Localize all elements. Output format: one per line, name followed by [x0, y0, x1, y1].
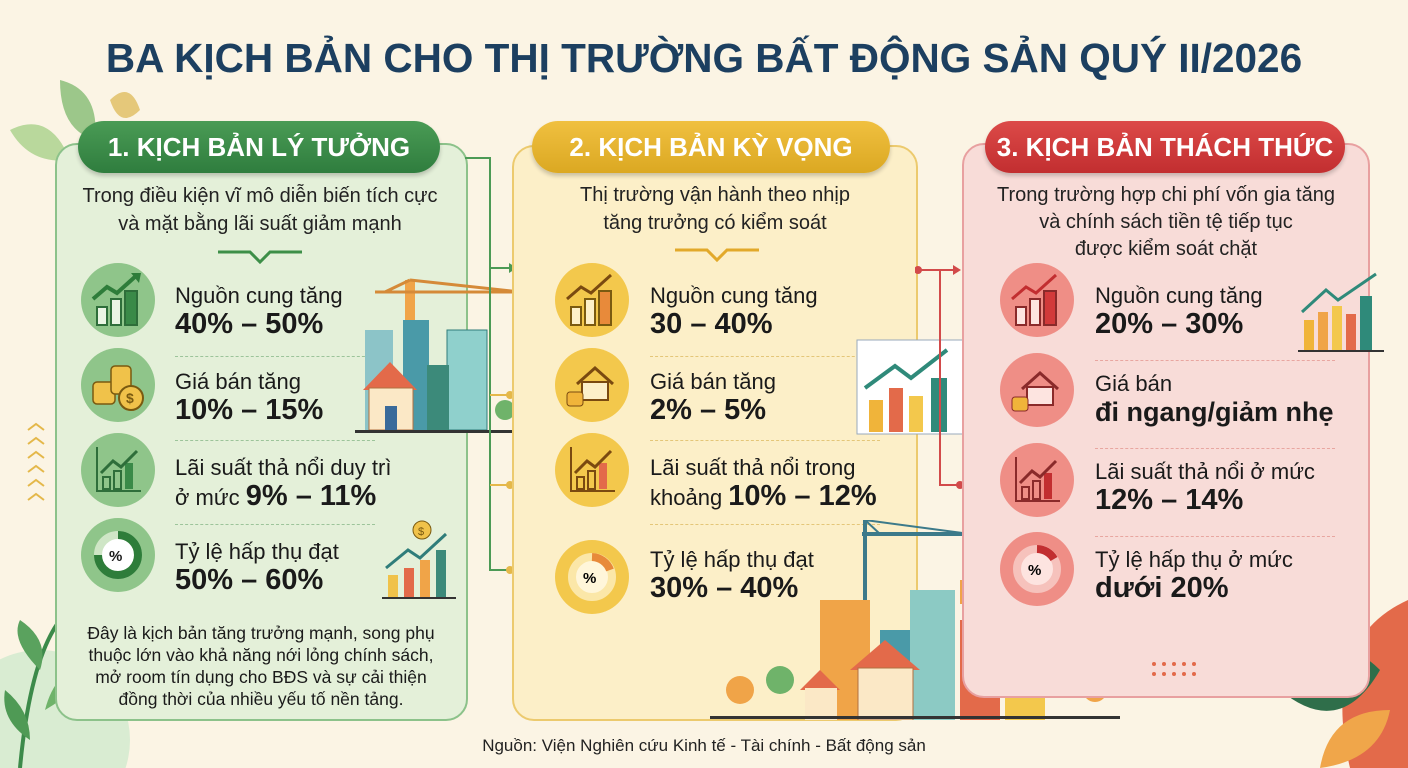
rows: scenario 1: Lãi suất thả nổi duy trì [175, 455, 391, 480]
rows: scenario 1: Giá bán tăng [175, 369, 301, 394]
header: scenario 1 [78, 121, 440, 173]
subtitle: scenario 1: và mặt bằng lãi suất giảm mạnh [118, 213, 402, 235]
panel: scenario 3 [962, 143, 1370, 698]
decorative leaves bottom-right [1290, 600, 1408, 768]
title: BA KỊCH BẢN CHO THỊ TRƯỜNG BẤT ĐỘNG SẢN QUÝ II/2026 [106, 35, 1302, 81]
illustration: chart between 2 and 3 [856, 340, 962, 434]
subtitle: scenario 1 [82, 184, 438, 235]
subtitle: scenario 2: tăng trưởng có kiểm soát [603, 212, 827, 234]
decorative leaves bottom-left [0, 620, 130, 768]
rows: scenario 2: Tỷ lệ hấp thụ đạt [650, 547, 814, 572]
panel: scenario 2 [512, 145, 918, 721]
subtitle: scenario 3: và chính sách tiền tệ tiếp tục [1039, 211, 1293, 233]
rows: scenario 3: 12% – 14% [1095, 484, 1243, 516]
rows: scenario 3: 20% – 30% [1095, 308, 1243, 340]
icon: supply chart [1000, 263, 1074, 337]
rows: scenario 1: 40% – 50% [175, 308, 323, 340]
rows: scenario 1: Tỷ lệ hấp thụ đạt [175, 539, 339, 564]
icon: house and coins [1000, 353, 1074, 427]
icon: absorption donut: % [109, 548, 122, 565]
header: scenario 3: 3. KỊCH BẢN THÁCH THỨC [997, 132, 1333, 162]
rows: scenario 1: 10% – 15% [175, 394, 323, 426]
rows: scenario 2: 30 – 40% [650, 308, 773, 340]
illustration: city bottom center [710, 520, 1120, 720]
icon: coins [81, 348, 155, 422]
rows: scenario 1: 50% – 60% [175, 564, 323, 596]
decorative dots [1152, 662, 1196, 676]
icon: chart panel 3 [1298, 272, 1384, 352]
header: scenario 3 [985, 121, 1345, 173]
icon: interest chart [81, 433, 155, 507]
icon: absorption donut [1000, 532, 1074, 606]
footer note: scenario 1 [87, 623, 435, 709]
rows: scenario 2: 30% – 40% [650, 572, 798, 604]
header: scenario 2: 2. KỊCH BẢN KỲ VỌNG [569, 132, 853, 162]
decorative leaves top-left [10, 80, 140, 160]
rows: scenario 3: Giá bán [1095, 371, 1172, 396]
icon: supply chart [555, 263, 629, 337]
icon: interest chart [1000, 443, 1074, 517]
subtitle: scenario 3: được kiểm soát chặt [1075, 238, 1257, 260]
footer note: scenario 1: Đây là kịch bản tăng trưởng mạnh, song phụ [87, 623, 435, 643]
rows: scenario 2: Lãi suất thả nổi trong [650, 455, 855, 480]
icon: coins: $ [126, 390, 134, 406]
subtitle: scenario 2: Thị trường vận hành theo nhịp [580, 184, 850, 206]
rows: scenario 2: Giá bán tăng [650, 369, 776, 394]
rows: scenario 2: Nguồn cung tăng [650, 283, 818, 308]
subtitle: scenario 1: Trong điều kiện vĩ mô diễn biến tích cực [82, 185, 438, 207]
rows: scenario 3: Lãi suất thả nổi ở mức [1095, 459, 1315, 484]
source: Nguồn: Viện Nghiên cứu Kinh tế - Tài chính - Bất động sản [482, 736, 926, 755]
connector arrows 1->2 [465, 157, 512, 574]
subtitle: scenario 3: Trong trường hợp chi phí vốn gia tăng [997, 184, 1335, 206]
subtitle: scenario 3 [997, 184, 1335, 260]
illustration: city panel 1 [355, 278, 512, 433]
rows: scenario 3 [1000, 263, 1335, 606]
icon: supply chart [81, 263, 155, 337]
header: scenario 1: 1. KỊCH BẢN LÝ TƯỞNG [108, 132, 410, 162]
footer note: scenario 1: mở room tín dụng cho BĐS và sự cải thiện [95, 667, 427, 687]
panel: scenario 1 [55, 143, 468, 721]
icon: absorption donut: % [1028, 562, 1041, 579]
rows: scenario 1 [81, 263, 391, 596]
subtitle: scenario 2 [580, 184, 850, 234]
rows: scenario 3: đi ngang/giảm nhẹ [1095, 397, 1334, 427]
rows: scenario 2: khoảng 10% – 12% [650, 480, 877, 512]
icon: growth chart with dollar [382, 520, 456, 599]
footer note: scenario 1: đồng thời của nhiều yếu tố nền tảng. [119, 689, 403, 709]
icon: absorption donut: % [583, 570, 596, 587]
icon: absorption donut [81, 518, 155, 592]
rows: scenario 2 [555, 263, 880, 614]
icon: house and coins [555, 348, 629, 422]
rows: scenario 3: dưới 20% [1095, 572, 1228, 604]
rows: scenario 1: Nguồn cung tăng [175, 283, 343, 308]
rows: scenario 3: Nguồn cung tăng [1095, 283, 1263, 308]
rows: scenario 2: 2% – 5% [650, 394, 766, 426]
header: scenario 2 [532, 121, 890, 173]
footer note: scenario 1: thuộc lớn vào khả năng nới lỏng chính sách, [88, 645, 433, 665]
connector arrows 2->3 [915, 265, 962, 489]
icon: interest chart [555, 433, 629, 507]
icon: growth chart with dollar: $ [418, 526, 424, 538]
rows: scenario 1: ở mức 9% – 11% [175, 480, 376, 512]
rows: scenario 3: Tỷ lệ hấp thụ ở mức [1095, 547, 1293, 572]
chevrons left [28, 422, 44, 501]
icon: absorption donut [555, 540, 629, 614]
